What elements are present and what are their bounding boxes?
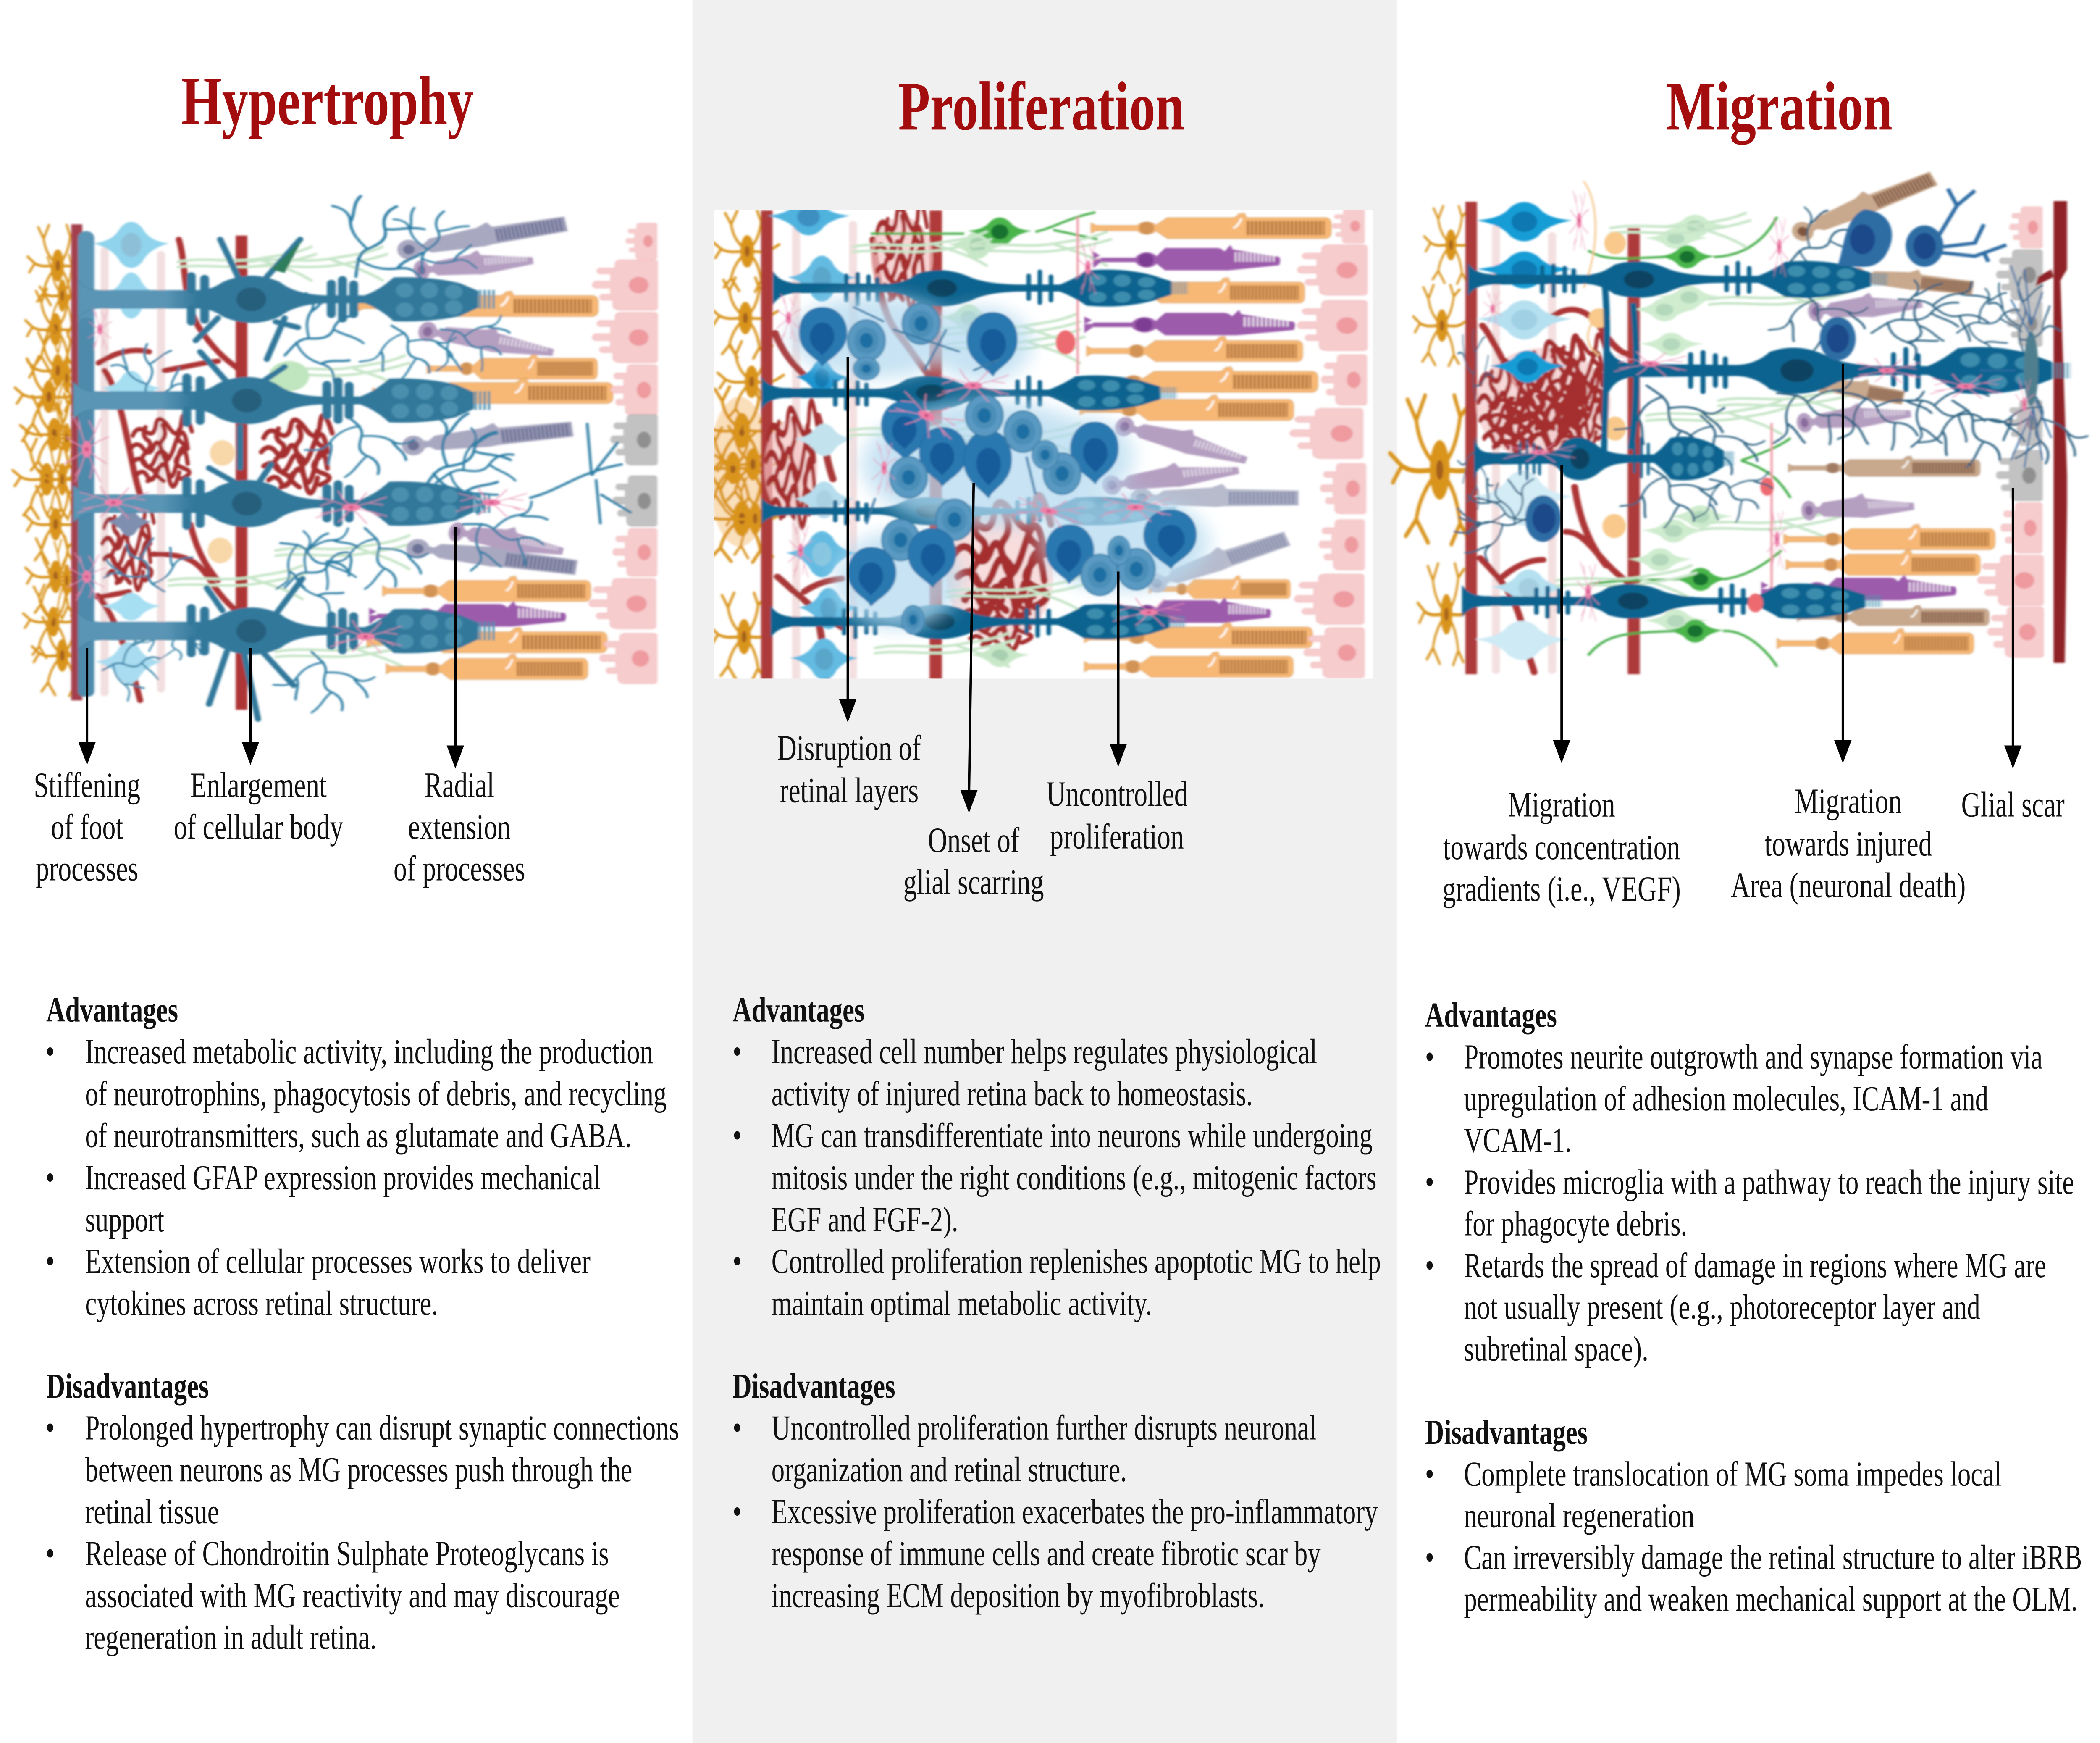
text block: proliferation advantages: EGF and FGF-2). [772, 1200, 958, 1239]
text block: migration advantages: • [1425, 1037, 1434, 1076]
text block: proliferation advantages: Advantages [732, 990, 864, 1029]
Muller glia: retained cells [762, 270, 1188, 639]
label: Migration towards concentration gradients: towards concentration [1443, 828, 1680, 867]
text block: hypertrophy advantages: Increased GFAP expression provides mechanical [85, 1158, 601, 1197]
text block: migration disadvantages: Can irreversibly damage the retinal structure to alter iBRB [1464, 1538, 2082, 1577]
arrow: onset of glial scarring [960, 483, 978, 813]
microglia [776, 240, 1184, 627]
arrow: glial scar [2004, 488, 2021, 768]
panel: hypertrophy [13, 63, 686, 1656]
text block: hypertrophy disadvantages: Release of Chondroitin Sulphate Proteoglycans is [85, 1534, 609, 1573]
text block: proliferation advantages: • [732, 1242, 742, 1280]
text block: proliferation disadvantages: • [732, 1408, 742, 1447]
illustration white backdrop [714, 210, 1373, 678]
label: Radial extension of processes: Radial [425, 766, 494, 805]
ganglion and bipolar cells [767, 198, 1111, 680]
text block: proliferation disadvantages: Disadvantages [732, 1367, 895, 1405]
text block: hypertrophy disadvantages: Prolonged hypertrophy can disrupt synaptic connections [85, 1408, 679, 1447]
text block: hypertrophy disadvantages: Disadvantages [46, 1367, 209, 1405]
retina illustration: proliferation [695, 198, 1373, 681]
text block: hypertrophy advantages: cytokines across retinal structure. [85, 1283, 438, 1322]
label: Radial extension of processes: of processes [394, 849, 525, 889]
text block: migration advantages: • [1425, 1162, 1434, 1201]
label: Onset of glial scarring: glial scarring [903, 862, 1044, 902]
title: Proliferation: Proliferation [898, 68, 1184, 145]
ganglion and bipolar cells [1473, 181, 1858, 667]
panel: proliferation [695, 68, 1388, 1614]
blood vessels [71, 224, 332, 710]
text block: migration advantages: upregulation of adhesion molecules, ICAM-1 and [1464, 1079, 1988, 1118]
label: Enlargement of cellular body: Enlargement [190, 766, 327, 805]
title: Migration: Migration [1666, 68, 1893, 145]
photoreceptors [1078, 213, 1331, 677]
text block: hypertrophy advantages: Extension of cellular processes works to deliver [85, 1242, 591, 1280]
label: Stiffening of foot processes: processes [36, 849, 138, 889]
text block: proliferation advantages: Increased cell number helps regulates physiological [772, 1032, 1317, 1071]
microglia [65, 308, 527, 653]
label: Migration towards concentration gradients: gradients (i.e., VEGF) [1442, 870, 1681, 909]
arrow: migration toward injured area [1834, 364, 1851, 763]
label: Glial scar: Glial scar [1961, 785, 2065, 825]
label: Migration towards injured area: Area (neuronal death) [1731, 866, 1966, 905]
text block: migration disadvantages: Disadvantages [1425, 1413, 1588, 1451]
text block: migration advantages: subretinal space). [1464, 1329, 1648, 1368]
text block: proliferation advantages: Controlled proliferation replenishes apoptotic MG to help [772, 1242, 1381, 1280]
text block: migration advantages: VCAM-1. [1464, 1121, 1572, 1159]
text block: proliferation disadvantages: response of immune cells and create fibrotic scar by [772, 1534, 1321, 1573]
Muller glia: hypertrophic cells [74, 231, 496, 719]
text block: migration disadvantages: Complete translocation of MG soma impedes local [1464, 1454, 2002, 1493]
arrow: foot processes [79, 648, 96, 765]
arrow: uncontrolled proliferation [1110, 571, 1127, 767]
dendritic processes of migrating cells [1446, 197, 2090, 565]
retinal ganglion and bipolar cells [93, 222, 414, 684]
retina illustration: hypertrophy [13, 183, 657, 726]
text block: migration disadvantages: • [1425, 1454, 1434, 1493]
label: Migration towards injured area: Migration [1795, 782, 1902, 821]
label: Radial extension of processes: extension [408, 807, 511, 847]
text block: migration advantages: not usually present (e.g., photoreceptor layer and [1464, 1288, 1980, 1326]
label: Stiffening of foot processes: of foot [51, 807, 123, 847]
arrow: disruption of retinal layers [839, 357, 856, 723]
text block: migration advantages: Advantages [1425, 996, 1557, 1034]
label: Migration towards concentration gradients: Migration [1508, 785, 1615, 825]
proliferating cell halos [791, 296, 1209, 629]
migrated dark blue cells [1525, 189, 2006, 542]
text block: proliferation advantages: MG can transdifferentiate into neurons while undergoing [772, 1116, 1373, 1155]
arrow: migration toward gradients [1553, 465, 1570, 763]
astrocytes [695, 211, 788, 681]
panel: migration [1390, 68, 2090, 1618]
text block: migration advantages: Retards the spread of damage in regions where MG are [1464, 1246, 2046, 1285]
text block: hypertrophy disadvantages: regeneration in adult retina. [85, 1618, 377, 1656]
text block: proliferation advantages: mitosis under the right conditions (e.g., mitogenic factors [772, 1158, 1376, 1197]
label: Onset of glial scarring: Onset of [928, 821, 1019, 860]
label: Enlargement of cellular body: of cellular body [174, 807, 344, 847]
text block: migration disadvantages: • [1425, 1538, 1434, 1577]
retinal pigment epithelium cells [1290, 209, 1367, 678]
text block: hypertrophy advantages: Increased metabolic activity, including the production [85, 1032, 653, 1071]
title: Hypertrophy: Hypertrophy [181, 63, 473, 139]
retina illustration: migration [1390, 166, 2090, 674]
text block: hypertrophy advantages: support [85, 1200, 164, 1239]
text block: hypertrophy advantages: • [45, 1158, 55, 1197]
label: Disruption of retinal layers: Disruption of [777, 728, 921, 768]
text block: migration advantages: Provides microglia with a pathway to reach the injury site [1464, 1162, 2074, 1201]
text block: hypertrophy advantages: of neurotransmitters, such as glutamate and GABA. [85, 1116, 632, 1155]
text block: hypertrophy disadvantages: retinal tissue [85, 1492, 219, 1531]
text block: migration advantages: Promotes neurite outgrowth and synapse formation via [1464, 1037, 2042, 1076]
retinal pigment epithelium cells [589, 223, 657, 684]
text block: migration advantages: • [1425, 1246, 1434, 1285]
panel: proliferation background [693, 0, 1397, 1743]
text block: migration disadvantages: permeability and weaken mechanical support at the OLM. [1464, 1580, 2078, 1618]
label: Uncontrolled proliferation: proliferation [1050, 817, 1184, 857]
Muller glia: migrating cells [1462, 261, 2071, 618]
photoreceptors [1761, 166, 1995, 654]
microglia [1483, 191, 2034, 622]
text block: proliferation disadvantages: Excessive proliferation exacerbates the pro-inflammatory [772, 1492, 1378, 1531]
text block: hypertrophy advantages: • [45, 1242, 55, 1280]
arrow: cellular body [242, 648, 259, 765]
label: Uncontrolled proliferation: Uncontrolled [1046, 775, 1188, 814]
text block: hypertrophy disadvantages: associated with MG reactivity and may discourage [85, 1576, 620, 1614]
text block: hypertrophy disadvantages: • [45, 1534, 55, 1573]
glial scar [1979, 266, 2053, 468]
arrow: radial extension [446, 527, 464, 768]
radial dendritic processes [92, 183, 632, 726]
text block: proliferation advantages: • [732, 1116, 742, 1155]
text block: proliferation advantages: • [732, 1032, 742, 1071]
astrocytes [1390, 206, 1486, 665]
text block: hypertrophy advantages: • [45, 1032, 55, 1071]
text block: proliferation disadvantages: organization and retinal structure. [772, 1450, 1127, 1489]
text block: hypertrophy advantages: Advantages [46, 990, 178, 1029]
text block: migration disadvantages: neuronal regeneration [1464, 1496, 1695, 1535]
text block: migration advantages: for phagocyte debris. [1464, 1204, 1687, 1243]
text block: proliferation disadvantages: • [732, 1492, 742, 1531]
label: Stiffening of foot processes: Stiffening [34, 766, 140, 805]
astrocytes [13, 225, 91, 696]
retinal pigment epithelium and scar cells [1978, 207, 2043, 657]
text block: proliferation advantages: maintain optimal metabolic activity. [772, 1283, 1152, 1322]
text block: hypertrophy disadvantages: between neurons as MG processes push through the [85, 1450, 632, 1489]
photoreceptors [358, 210, 613, 679]
label: Disruption of retinal layers: retinal layers [780, 771, 919, 810]
blood vessels [1465, 201, 2067, 674]
text block: proliferation advantages: activity of injured retina back to homeostasis. [772, 1074, 1253, 1113]
proliferating Muller cells [799, 303, 1196, 634]
text block: hypertrophy disadvantages: • [45, 1408, 55, 1447]
blood vessels [761, 202, 1053, 679]
text block: proliferation disadvantages: increasing ECM deposition by myofibroblasts. [772, 1576, 1265, 1614]
text block: proliferation disadvantages: Uncontrolled proliferation further disrupts neuronal [772, 1408, 1316, 1447]
text block: hypertrophy advantages: of neurotrophins, phagocytosis of debris, and recycling [85, 1074, 667, 1113]
label: Migration towards injured area: towards injured [1764, 824, 1932, 864]
